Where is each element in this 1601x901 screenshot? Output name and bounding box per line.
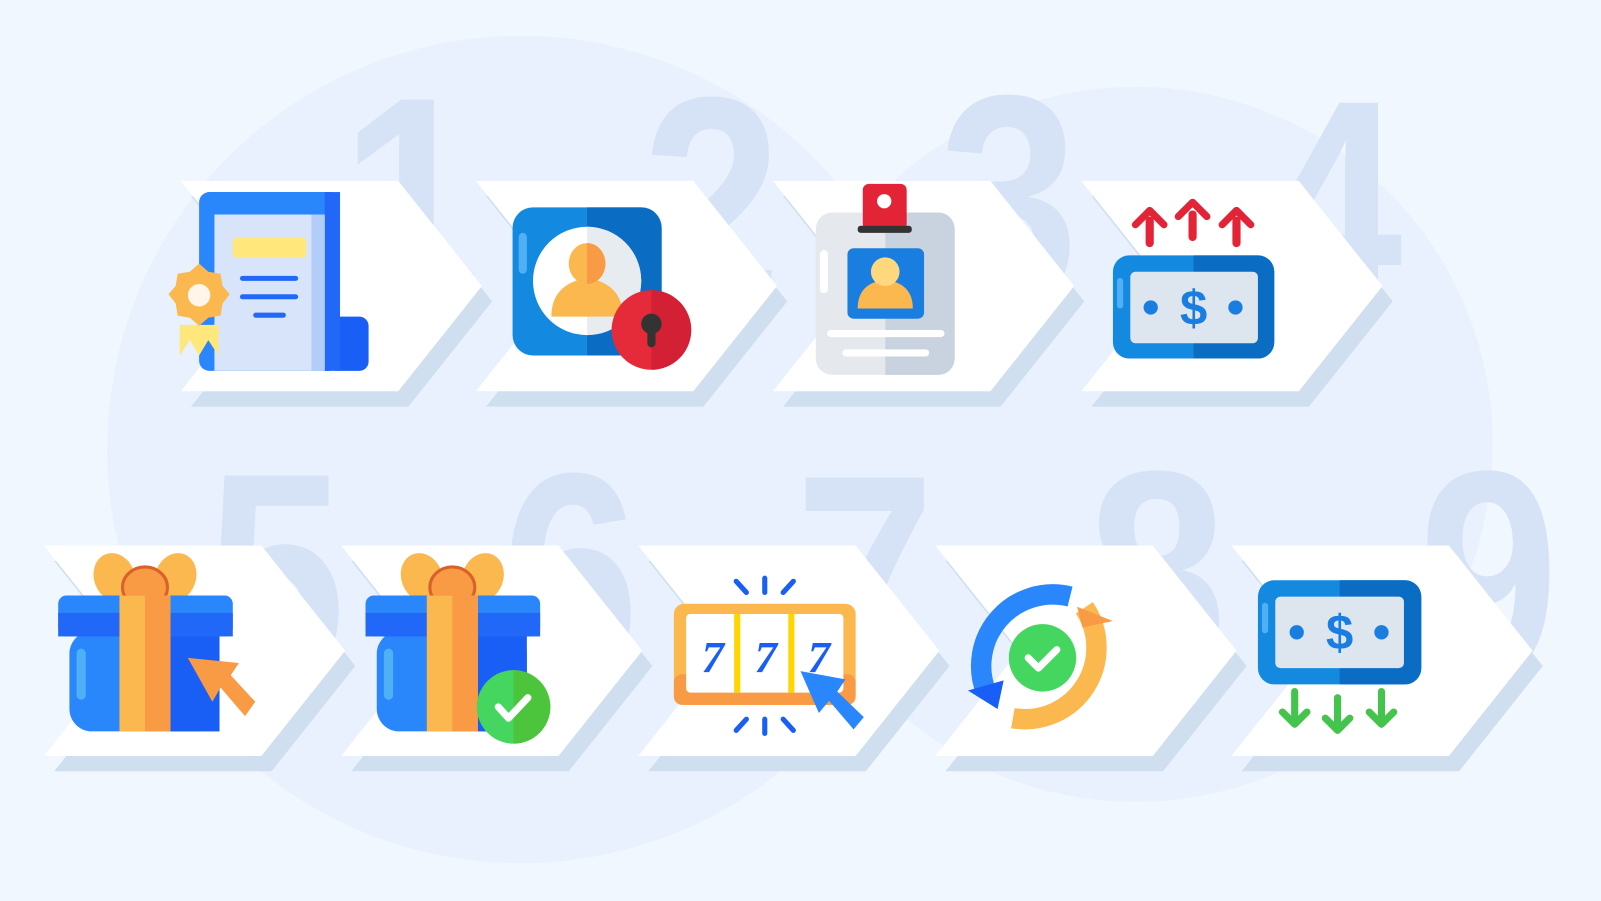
big step numbers: 2: [642, 36, 782, 367]
background circle right: [778, 87, 1493, 802]
chevron shadows: [54, 196, 1543, 771]
icon: slot machine 777: 7: [808, 632, 832, 682]
background circle left: [107, 36, 934, 863]
big step numbers: 6: [500, 412, 640, 743]
icon: money with up arrows: [1113, 202, 1274, 359]
big step numbers: 8: [1087, 410, 1227, 741]
icon: slot machine 777: 7: [755, 632, 779, 682]
big step numbers: 5: [206, 412, 346, 743]
icon: refresh with check: [968, 594, 1113, 719]
icon: gift with cursor: [58, 547, 255, 731]
big step numbers: [206, 34, 1559, 745]
icon: profile lock: [513, 207, 691, 370]
icon: ID badge: [816, 184, 955, 375]
icon: money with up arrows: $: [1180, 282, 1207, 336]
big step numbers: 3: [939, 34, 1079, 365]
icon: slot machine 777: [674, 578, 864, 733]
chevrons: [44, 181, 1533, 756]
icon: gift with check: [366, 547, 550, 744]
big step numbers: 4: [1262, 39, 1404, 370]
icon: money with down arrows: $: [1326, 607, 1353, 661]
icon: money with down arrows: [1258, 580, 1421, 730]
big step numbers: 9: [1419, 410, 1559, 741]
icon: slot machine 777: 7: [701, 632, 725, 682]
big step numbers: 7: [795, 414, 935, 745]
icon: certificate: [168, 192, 369, 371]
big step numbers: 1: [340, 36, 480, 367]
